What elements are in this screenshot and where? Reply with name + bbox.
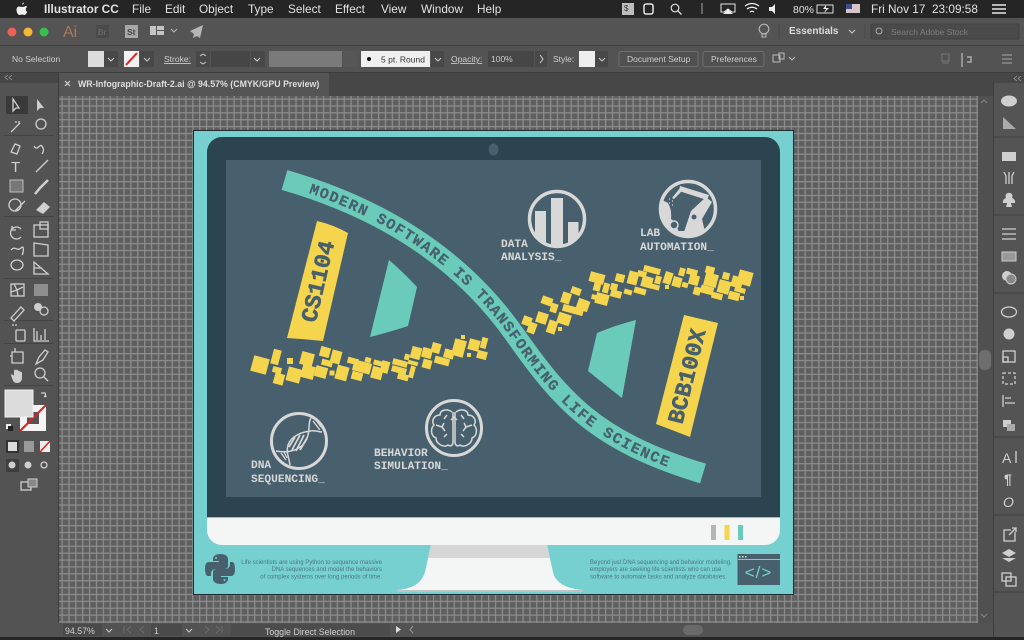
- label: behavior simulation: BEHAVIOR: [374, 448, 428, 460]
- lower DNA pixel strand: [251, 336, 488, 385]
- menu bar: Type: [248, 2, 274, 16]
- right icons panel: A: [1002, 450, 1012, 466]
- document tab bar: WR-Infographic-Draft-2.ai @ 94.57% (CMYK/GPU Preview): [78, 79, 319, 89]
- menu bar: Fri Nov 17: [871, 2, 925, 16]
- label: lab automation: [640, 228, 714, 254]
- label: lab automation: AUTOMATION_: [640, 242, 714, 254]
- menu bar: [0, 0, 1024, 18]
- right icons panel: ¶: [1004, 471, 1012, 487]
- right icons panel: O: [1003, 494, 1014, 510]
- icon: behavior simulation brain: [426, 400, 482, 456]
- canvas grid: [59, 96, 978, 623]
- chin indicator lights: [711, 525, 743, 540]
- icon: python logo: [205, 554, 235, 584]
- icon: data analysis: [530, 192, 584, 252]
- footer text: right: [590, 560, 732, 580]
- yellow label: CS1104: CS1104: [297, 238, 341, 325]
- footer text: left: DNA sequences and model the behaviors: [272, 567, 382, 573]
- menu bar: Select: [288, 2, 322, 16]
- yellow label: BCB100X: [656, 315, 718, 437]
- label: data analysis: DATA: [501, 239, 528, 251]
- menu bar: Help: [477, 2, 502, 16]
- monitor bezel: [207, 137, 780, 517]
- control bar: Document Setup: [627, 54, 691, 64]
- menu bar: Window: [421, 2, 463, 16]
- label: lab automation: LAB: [640, 228, 660, 240]
- footer text: left: Life scientists are using Python to sequence massive: [241, 560, 383, 566]
- footer text: right: employers are seeking life scientists who can use: [590, 567, 722, 573]
- footer text: left: of complex systems over long periods of time.: [260, 574, 382, 580]
- icon: code window: [738, 554, 780, 585]
- yellow label: CS1104: [287, 221, 348, 341]
- app title bar: Ai: [63, 24, 77, 41]
- menu bar: Effect: [335, 2, 366, 16]
- label: DNA sequencing: DNA: [251, 460, 271, 472]
- left tools panel: [0, 73, 59, 640]
- label: DNA sequencing: SEQUENCING_: [251, 474, 325, 486]
- selection and pen tools: [11, 99, 46, 154]
- upper DNA pixel strand: [522, 266, 753, 334]
- app title bar: Essentials: [789, 26, 839, 37]
- teal trapezoid right: [588, 320, 636, 398]
- label: data analysis: [501, 239, 562, 264]
- icon: code window: </>: [745, 563, 772, 582]
- right scrollbar: [978, 96, 993, 623]
- menu bar: Edit: [165, 2, 186, 16]
- status bar: 94.57%: [65, 626, 95, 636]
- menu bar: 23:09:58: [932, 2, 978, 16]
- control bar: [0, 46, 1024, 73]
- menu bar: File: [132, 2, 151, 16]
- fill and stroke swatches: [5, 390, 50, 490]
- app title bar: Search Adobe Stock: [891, 27, 969, 37]
- app title bar: St: [127, 27, 136, 37]
- label: behavior simulation: [374, 448, 448, 473]
- control bar: 100%: [491, 54, 513, 64]
- icon: DNA sequencing: [272, 414, 326, 468]
- menu bar: View: [381, 2, 407, 16]
- icon: lab automation robot: [655, 182, 716, 241]
- label: behavior simulation: SIMULATION_: [374, 461, 448, 473]
- app title bar: [0, 18, 1024, 46]
- yellow label: BCB100X: BCB100X: [664, 326, 713, 427]
- label: data analysis: ANALYSIS_: [501, 252, 562, 264]
- teal trapezoid left: [370, 260, 417, 337]
- control bar: 5 pt. Round: [381, 54, 425, 64]
- status bar: [0, 623, 1024, 640]
- webcam: [488, 144, 498, 156]
- screen: [226, 160, 761, 497]
- monitor chin: [207, 518, 780, 545]
- shape tools: [9, 160, 50, 214]
- footer text: left: [241, 560, 383, 580]
- status bar: Toggle Direct Selection: [265, 627, 355, 637]
- S-curve ribbon: [284, 180, 703, 474]
- document tab bar: [0, 73, 1024, 96]
- artboard and view tools: [10, 348, 48, 383]
- artboard: monitor infographic: [193, 130, 794, 595]
- control bar: No Selection: [12, 54, 60, 64]
- footer text: right: software to automate tasks and analyze databases.: [590, 574, 727, 580]
- mesh and gradient tools: [11, 284, 48, 321]
- menu bar: Object: [199, 2, 234, 16]
- footer text: right: Beyond just DNA sequencing and behavior modeling,: [590, 560, 732, 566]
- ribbon title: MODERN SOFTWARE IS TRANSFORMING LIFE SCIENCE: [309, 184, 670, 467]
- menu bar: Illustrator CC: [44, 2, 119, 16]
- status bar: 1: [154, 626, 159, 636]
- control bar: Preferences: [711, 54, 757, 64]
- right icons panel: [993, 76, 1024, 637]
- label: DNA sequencing: [251, 460, 325, 486]
- control bar: Style:: [553, 54, 574, 64]
- control bar: Opacity:: [451, 54, 482, 64]
- graph tools: [12, 325, 49, 341]
- left tools panel: T: [11, 159, 20, 176]
- monitor stand: [397, 545, 583, 592]
- transform tools: [11, 222, 48, 274]
- menu bar: $: [624, 4, 629, 13]
- control bar: Stroke:: [164, 54, 191, 64]
- menu bar: 80%: [793, 4, 814, 16]
- app title bar: Br: [98, 27, 107, 37]
